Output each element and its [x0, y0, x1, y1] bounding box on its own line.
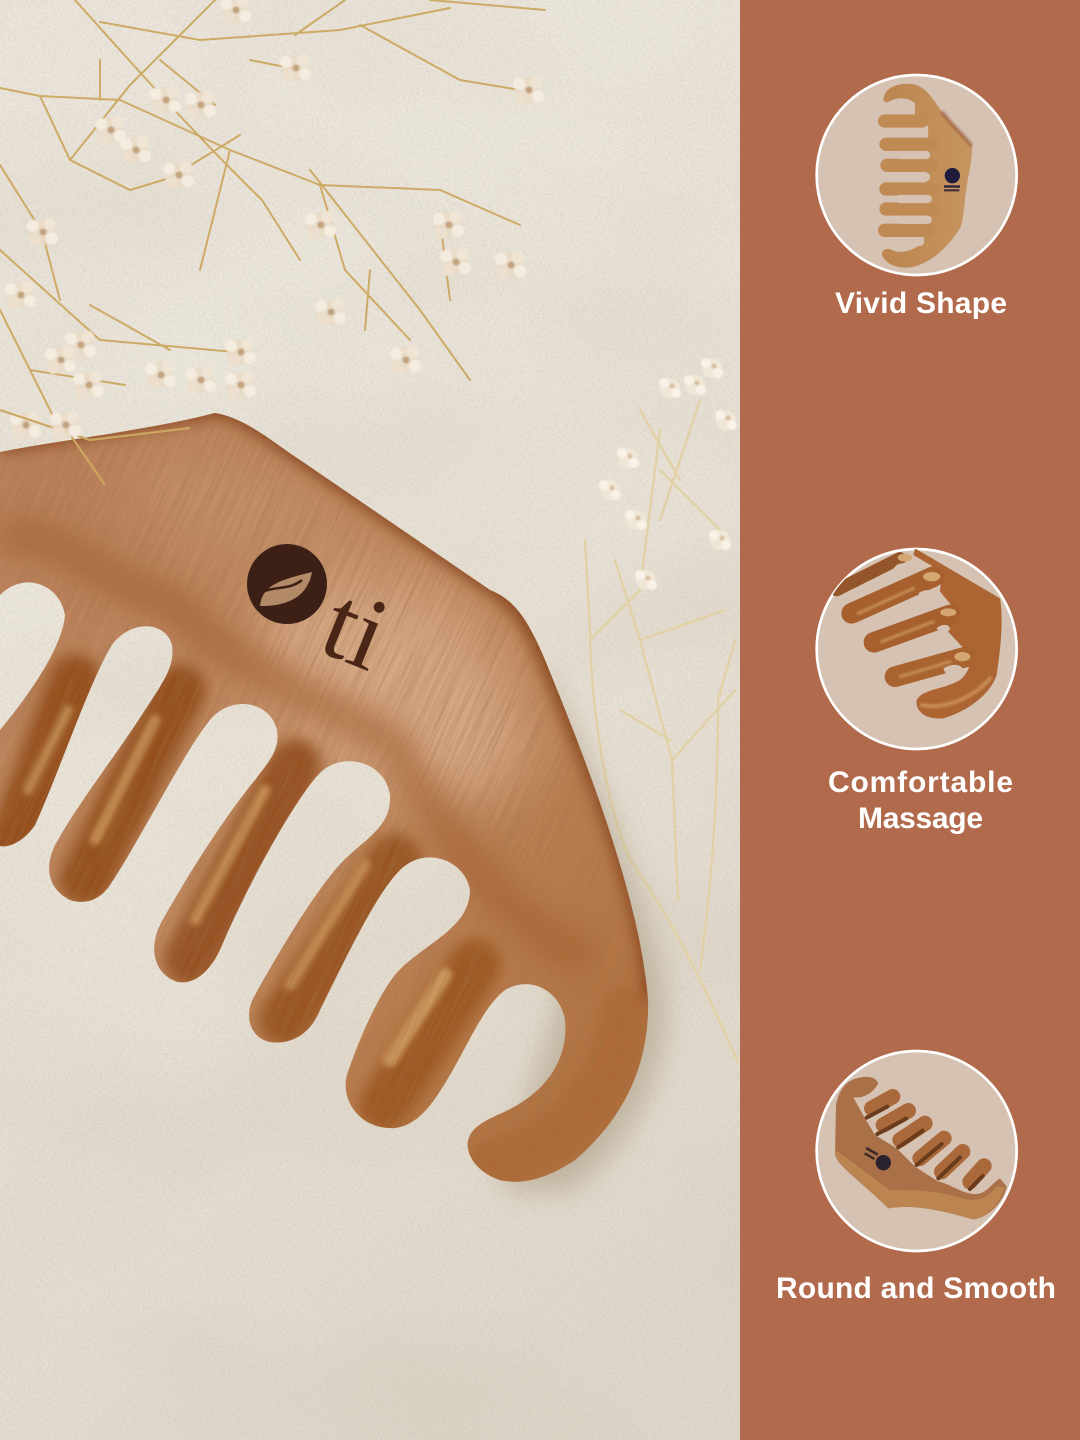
linen background photo [0, 0, 740, 1440]
thumbnail: comb angled view [817, 1051, 1017, 1251]
feature: comfortable massage [817, 548, 1022, 835]
logo lettering: ti [307, 565, 404, 693]
main wooden comb [0, 413, 648, 1182]
dried flower branches top left [0, 0, 545, 439]
comb soft shadow [500, 660, 665, 1190]
label: vivid shape: Vivid Shape [835, 287, 1007, 320]
baby's breath sprig right [585, 358, 738, 1062]
label: comfortable massage: Massage [858, 802, 983, 835]
thumbnail: comb front view [817, 75, 1017, 275]
thumbnail: comb teeth close-up [817, 548, 1017, 749]
engraved logo [247, 544, 404, 693]
right feature panel [778, 74, 1054, 1298]
twig over comb [0, 410, 190, 485]
label: round and smooth: Round and Smooth [776, 1272, 1056, 1305]
comb top bevel [0, 405, 655, 1000]
comb body [0, 413, 648, 1182]
feature: vivid shape [817, 75, 1017, 320]
logo badge [247, 544, 327, 624]
feature: round and smooth [776, 1051, 1056, 1305]
label: comfortable massage: Comfortable [828, 766, 1013, 799]
